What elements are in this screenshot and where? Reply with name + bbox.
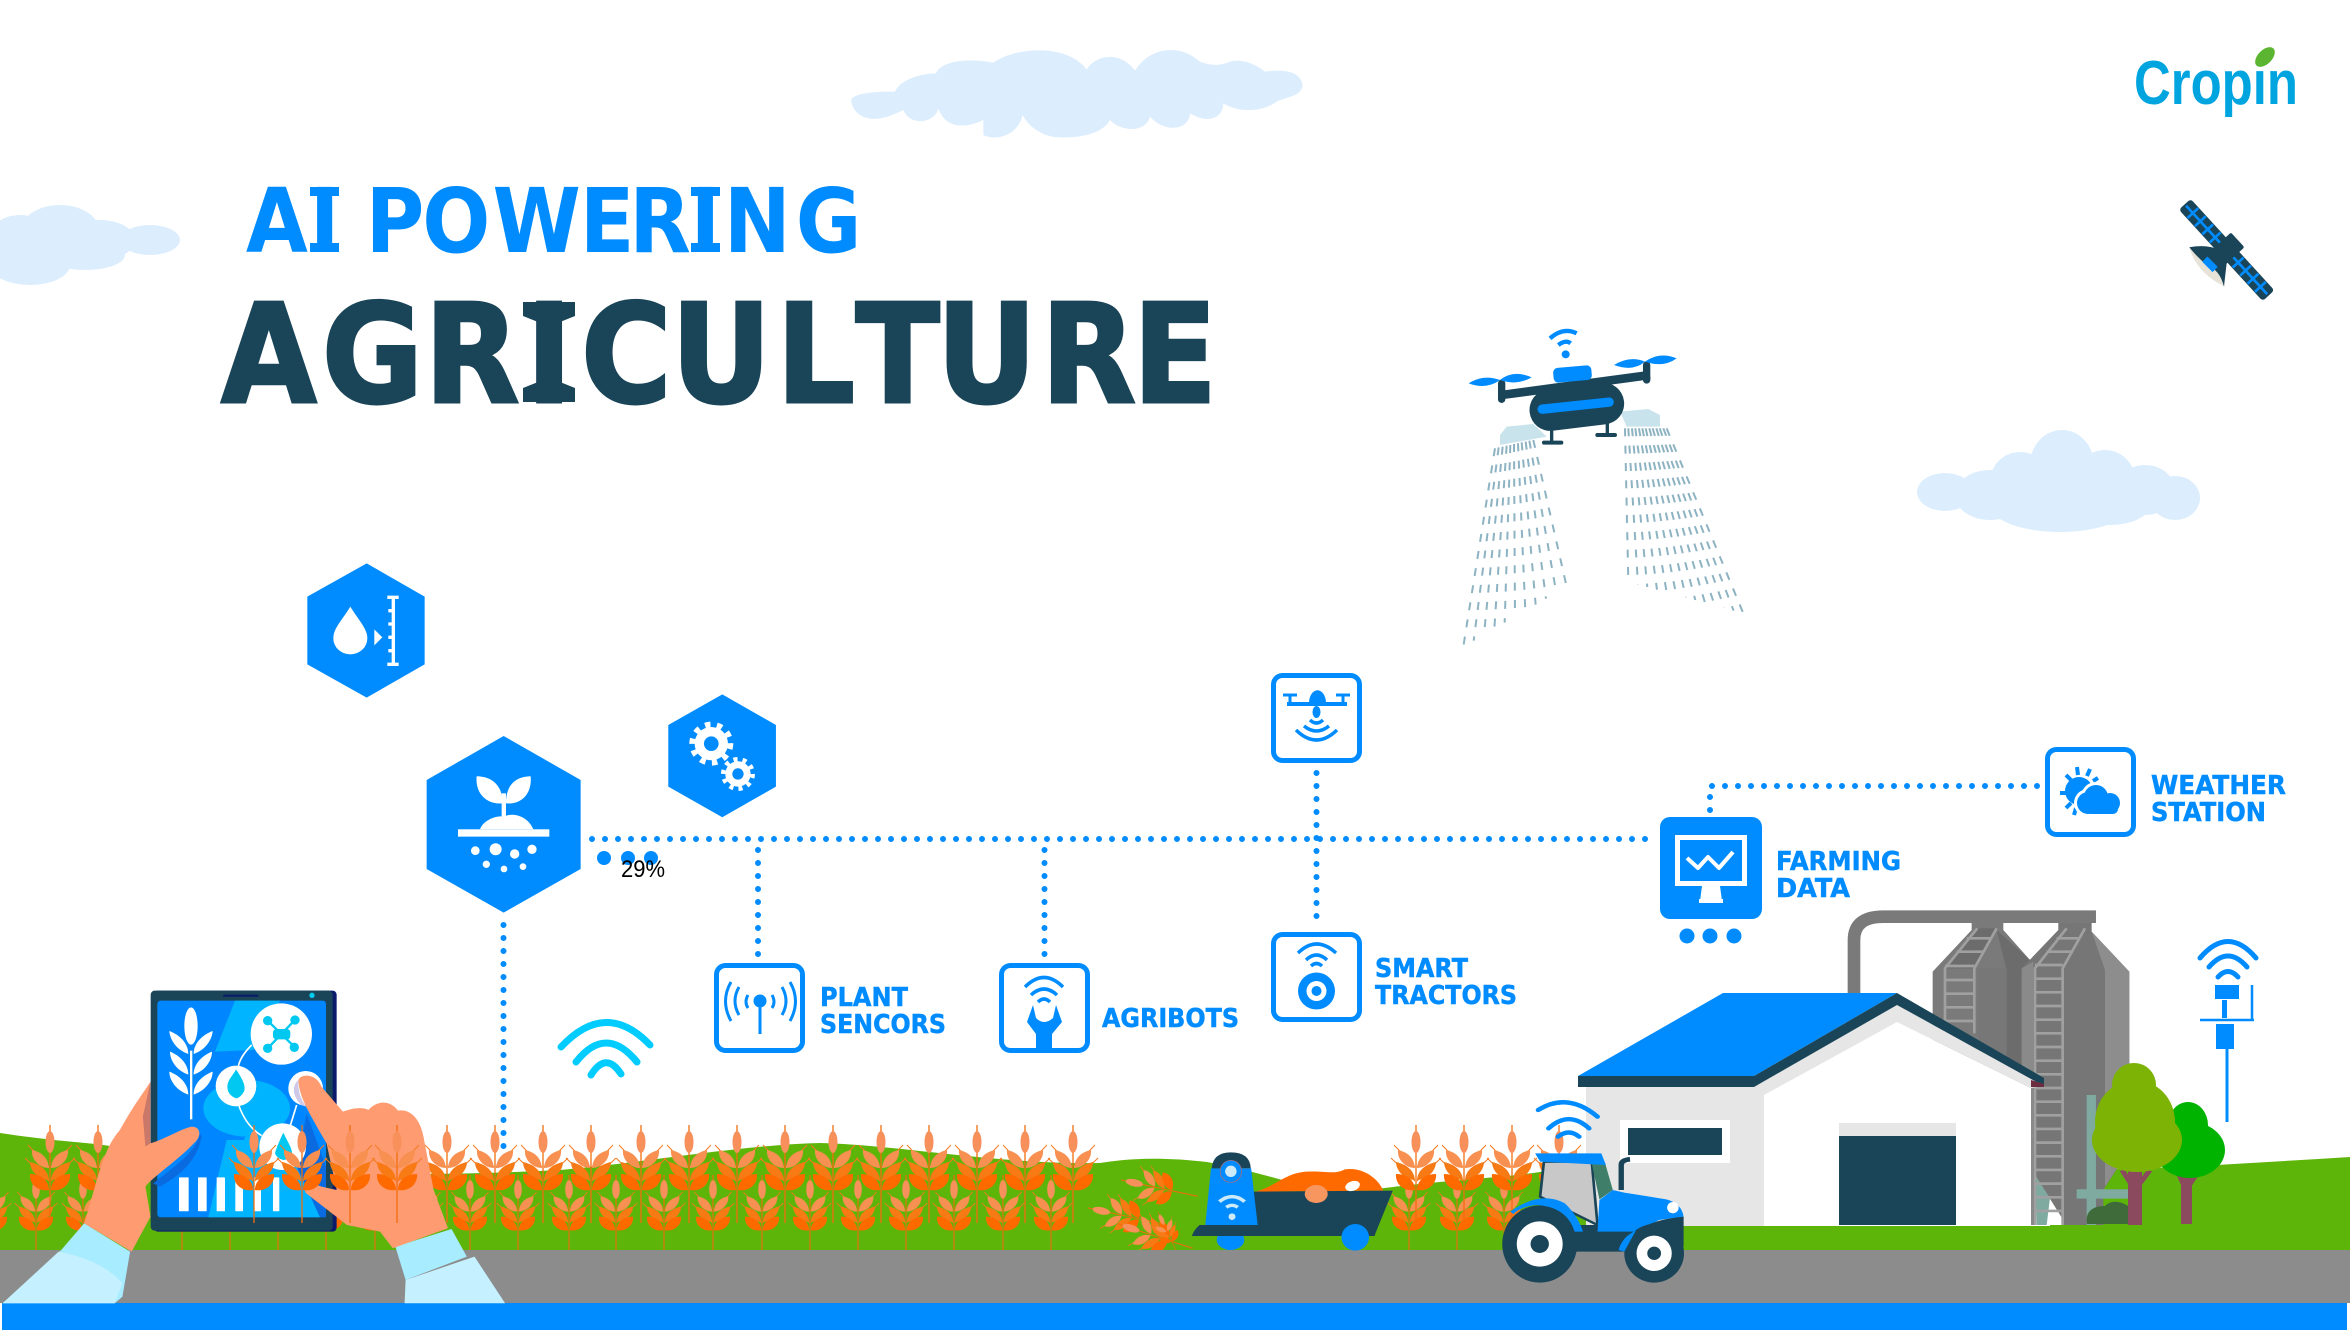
label: smart tractors — [1375, 954, 1517, 1011]
logo: Cropin: Cropin — [2134, 49, 2298, 118]
label: weather station: WEATHER — [2151, 771, 2286, 801]
label: weather station: STATION — [2151, 798, 2266, 828]
icon box: weather station — [2048, 750, 2134, 834]
label: agribots: AGRIBOTS — [1102, 1004, 1239, 1034]
icon box: agribots — [1002, 966, 1088, 1050]
percentage label: 29% — [621, 856, 665, 883]
icon: satellite — [2174, 194, 2280, 306]
bottom blue band — [2, 1303, 2347, 1330]
icon box: plant sensors — [716, 966, 802, 1050]
icon: wifi signal — [561, 1022, 650, 1075]
icon box: drone — [1274, 676, 1360, 760]
heading: AGRICULTURE: AGRICULTURE — [221, 275, 1217, 435]
progress dots — [597, 851, 658, 865]
cloud: left edge — [0, 205, 180, 285]
harvest robot and cart — [1192, 1152, 1393, 1251]
panel: farming data — [1660, 817, 1762, 944]
road — [0, 1250, 2350, 1303]
farmhouse — [1578, 993, 2044, 1226]
weather station pole — [2200, 942, 2256, 1122]
icon: water level hexagon — [307, 563, 425, 698]
trees — [2087, 1063, 2225, 1225]
icon: gears hexagon — [668, 694, 776, 817]
label: plant sensors — [820, 983, 946, 1040]
wheat field — [0, 1125, 1584, 1267]
silos — [1854, 917, 2130, 1225]
label: farming data — [1776, 847, 1901, 904]
tablet with app screen — [151, 991, 337, 1232]
label: plant sensors: PLANT — [820, 983, 908, 1013]
label: plant sensors: SENCORS — [820, 1010, 946, 1040]
label: weather station — [2151, 771, 2286, 828]
tractor — [1502, 1102, 1684, 1283]
icon box: smart tractors — [1274, 934, 1360, 1020]
hands holding tablet — [3, 1076, 505, 1303]
cloud: top centre — [851, 50, 1303, 137]
label: smart tractors: SMART — [1375, 954, 1468, 984]
label: farming data: DATA — [1776, 874, 1850, 904]
cloud: right — [1917, 430, 2200, 532]
label: farming data: FARMING — [1776, 847, 1901, 877]
illustration: spraying drone — [1463, 331, 1743, 647]
ground: green hills — [0, 1133, 2350, 1260]
wheat in front of tablet — [229, 1125, 422, 1223]
label: smart tractors: TRACTORS — [1375, 981, 1517, 1011]
icon: plant and soil hexagon — [427, 736, 581, 913]
heading: AI POWERING: AI POWERING — [246, 169, 862, 273]
dotted connector lines — [504, 773, 2038, 1155]
